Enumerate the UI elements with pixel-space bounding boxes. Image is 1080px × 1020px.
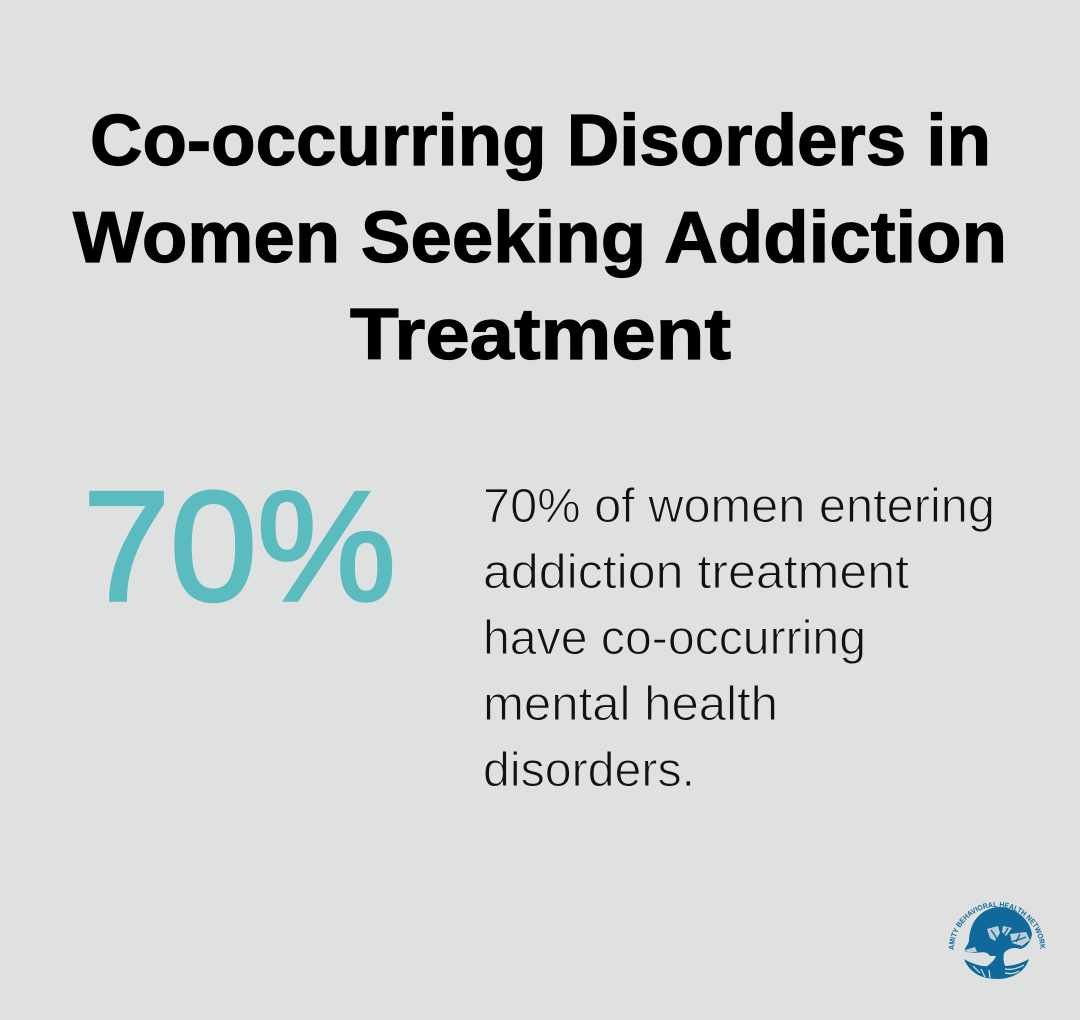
- logo: Amity Behavioral Health Network tree: [948, 902, 1046, 979]
- logo tree trunk: [983, 948, 1009, 971]
- logo tree canopy: [965, 907, 1032, 956]
- logo ring text: AMITY BEHAVIORAL HEALTH NETWORK: [948, 902, 1046, 950]
- title: [73, 101, 1007, 375]
- logo canopy light patches: [965, 926, 1030, 953]
- stat description: disorders.: [483, 744, 695, 797]
- stat description: mental health: [483, 678, 778, 731]
- stat description: 70% of women entering: [483, 480, 995, 533]
- stat description: addiction treatment: [483, 546, 909, 599]
- stat description: [483, 480, 995, 797]
- title: Women Seeking Addiction: [73, 198, 1007, 278]
- title: Co-occurring Disorders in: [90, 101, 991, 181]
- stat description: have co-occurring: [483, 612, 866, 665]
- logo tree branches: [991, 928, 1026, 952]
- title: Treatment: [350, 295, 731, 375]
- logo roots bowl: [964, 959, 1029, 979]
- logo root highlights: [973, 965, 1024, 978]
- big statistic: 70%: 70%: [83, 460, 396, 634]
